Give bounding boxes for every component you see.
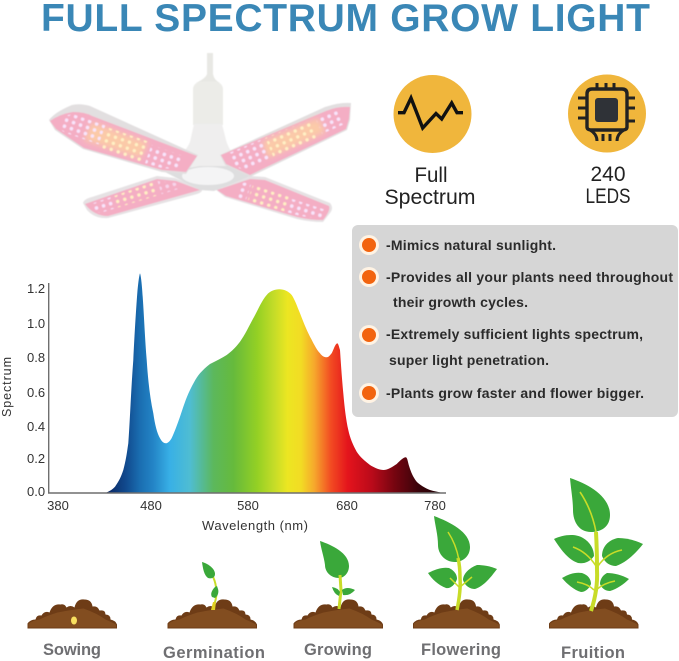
mature plant	[554, 478, 643, 611]
label: full spectrum	[384, 164, 476, 209]
label: full spectrum: Spectrum	[384, 186, 476, 209]
product photo: four-panel grow light	[49, 53, 351, 229]
y axis ticks: 0.4	[27, 419, 45, 434]
bullet: light penetration	[359, 325, 643, 368]
label: full spectrum: Full	[414, 164, 448, 187]
stage: flowering	[413, 516, 501, 659]
y axis ticks: 0.8	[27, 350, 45, 365]
lower left lamp panel	[83, 171, 202, 218]
socket	[193, 82, 223, 125]
seedling	[202, 562, 218, 610]
label: 240 LEDS	[586, 163, 630, 208]
bullet: growth cycles: their growth cycles.	[393, 294, 528, 310]
label: 240 LEDS: LEDS	[586, 185, 630, 208]
x axis ticks: 680	[336, 498, 358, 513]
soil mound	[294, 599, 383, 628]
label: 240 LEDS: 240	[590, 163, 626, 186]
spectrum area	[106, 273, 442, 493]
bullet: light penetration: -Extremely sufficient lights spectrum,	[386, 326, 643, 342]
x axis ticks: 380	[47, 498, 69, 513]
x axis ticks: 480	[140, 498, 162, 513]
axes	[49, 283, 446, 493]
y axis ticks: 0.0	[27, 484, 45, 499]
x axis title: Wavelength (nm)	[202, 518, 308, 533]
lower right lamp panel	[216, 176, 332, 222]
panel: benefits	[352, 225, 678, 417]
soil mound	[413, 599, 500, 628]
label: Flowering	[421, 641, 501, 659]
bullet: mimics sunlight	[359, 235, 556, 255]
x axis ticks	[47, 498, 446, 513]
y axis ticks: 0.6	[27, 385, 45, 400]
soil mound	[549, 599, 638, 628]
stage: sowing	[28, 599, 117, 659]
bullet: faster growth: -Plants grow faster and flower bigger.	[386, 385, 644, 401]
x axis ticks: 580	[237, 498, 259, 513]
y axis title: Spectrum	[0, 357, 14, 417]
young plant	[320, 541, 355, 609]
y axis ticks: 1.2	[27, 281, 45, 296]
soil mound	[28, 599, 117, 628]
soil mound	[168, 599, 257, 628]
icon: LED chip	[568, 74, 646, 152]
upper right lamp panel	[220, 103, 351, 177]
label: Growing	[304, 641, 372, 659]
upper left lamp panel	[49, 104, 198, 177]
label: Sowing	[43, 641, 101, 659]
icon: full spectrum wave	[394, 75, 472, 153]
y axis ticks	[27, 281, 45, 499]
bullet: light penetration: super light penetration.	[389, 352, 549, 368]
bullet: growth cycles: -Provides all your plants need throughout	[386, 269, 673, 285]
x axis ticks: 780	[424, 498, 446, 513]
neck and hub	[165, 124, 246, 188]
flowering plant	[428, 516, 497, 610]
spectrum chart	[0, 273, 446, 533]
y axis ticks: 0.2	[27, 451, 45, 466]
bullet: mimics sunlight: -Mimics natural sunlight.	[386, 237, 556, 253]
stage: germination	[163, 562, 265, 661]
bullet: growth cycles	[359, 267, 673, 310]
seed	[71, 616, 77, 624]
stage: growing	[294, 541, 383, 659]
y axis ticks: 1.0	[27, 316, 45, 331]
stage: fruition	[549, 478, 643, 661]
cord	[196, 53, 220, 83]
